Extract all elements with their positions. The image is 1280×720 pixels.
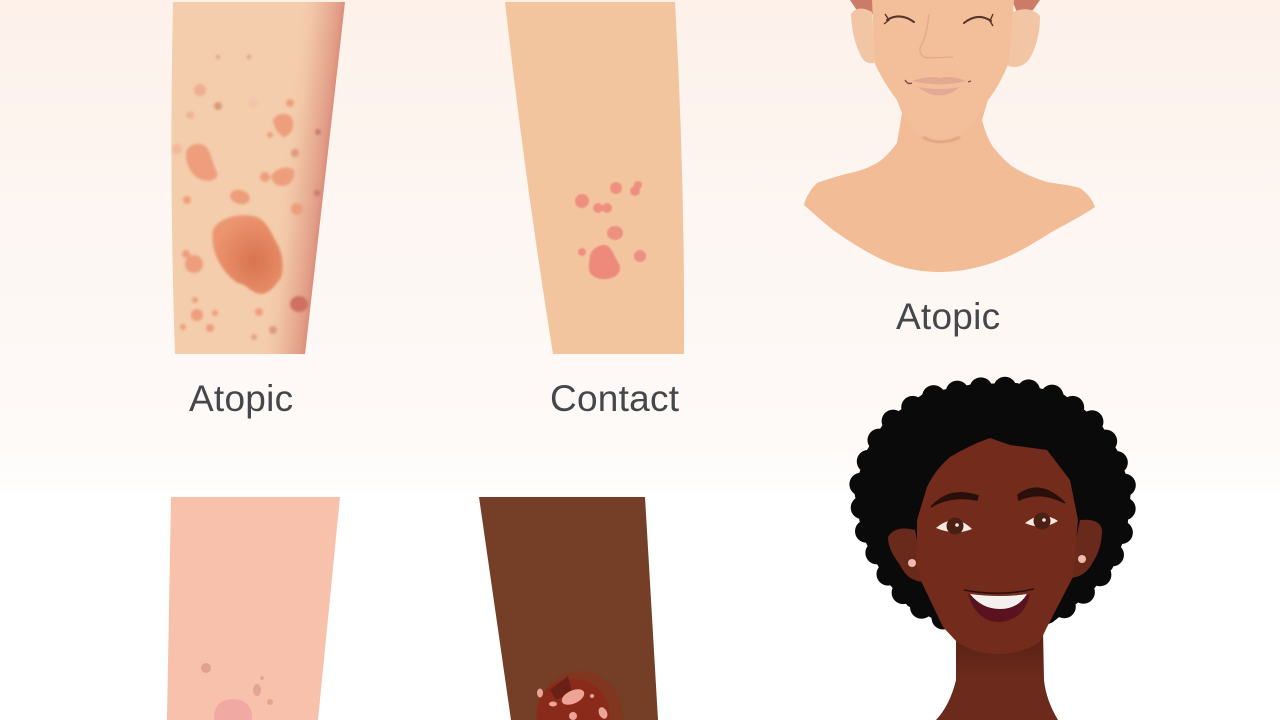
arm shape <box>479 497 658 720</box>
pupil highlights <box>955 523 959 527</box>
eyes <box>936 516 1058 532</box>
rash spots <box>575 181 646 279</box>
face <box>917 438 1078 654</box>
panel: atopic arm, light skin <box>171 2 345 354</box>
lips <box>912 77 966 96</box>
irises <box>946 518 964 534</box>
label: contact arm: Contact <box>550 378 680 419</box>
lesion highlights <box>537 686 609 720</box>
arm shape <box>171 2 345 354</box>
eyes <box>887 16 991 23</box>
arm shape <box>167 497 340 720</box>
arm shape <box>505 2 684 354</box>
nose <box>920 14 953 58</box>
ears <box>851 8 1040 67</box>
label: atopic arm: Atopic <box>189 378 293 419</box>
label: light skin portrait: Atopic <box>896 296 1000 337</box>
smile line <box>964 589 1034 593</box>
rash spots <box>172 55 321 340</box>
panel: contact arm <box>505 2 684 354</box>
mouth <box>968 594 1030 622</box>
eyebrows <box>931 488 1065 507</box>
hair <box>859 388 1126 640</box>
neck <box>936 630 1058 720</box>
arm shading <box>258 2 345 354</box>
teeth <box>970 594 1027 609</box>
eyelashes <box>884 14 993 26</box>
ears <box>888 520 1102 582</box>
lesion <box>536 671 623 720</box>
rash spots <box>201 663 273 720</box>
hair <box>850 0 1040 15</box>
panel: light skin portrait <box>804 0 1095 272</box>
neck and shoulders <box>804 100 1095 272</box>
panel: dark skin portrait <box>859 388 1126 720</box>
jaw shadow <box>923 137 960 142</box>
mouth corners <box>905 80 971 84</box>
panel: dark arm <box>479 497 658 720</box>
earrings <box>908 559 916 567</box>
face <box>872 0 1014 145</box>
panel: pale arm <box>167 497 340 720</box>
